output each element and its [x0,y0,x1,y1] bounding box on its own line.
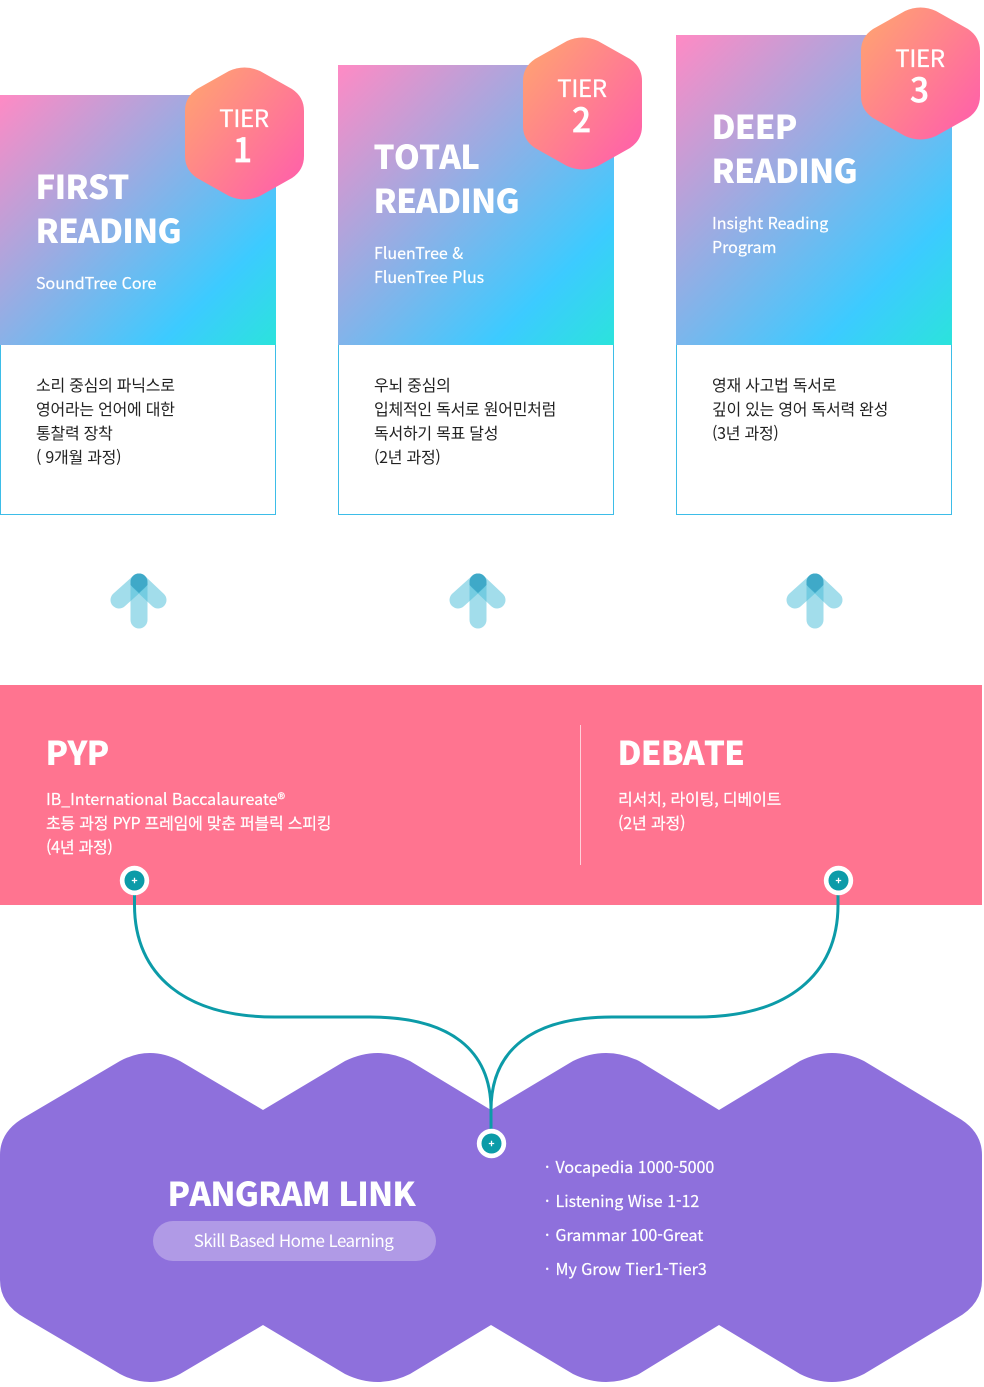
list item: Listening Wise 1-12 [556,1188,699,1212]
heading: first reading [36,161,181,253]
tier number 3: 3 [910,64,929,112]
debate description: 리서치, 라이팅, 디베이트 [618,786,781,810]
panel: pyp and debate band [0,685,982,905]
pyp description: 초등 과정 PYP 프레임에 맞춘 퍼블릭 스피킹 [46,810,331,834]
subtitle: fluentree: FluenTree Plus [374,264,484,288]
subtitle: soundtree core: SoundTree Core [36,270,156,294]
icon: node debate [824,866,854,896]
icon: node pangram [476,1128,506,1158]
divider [580,725,581,865]
list item: · [545,1154,549,1178]
description text: 우뇌 중심의 [374,372,451,396]
panel: total reading [338,38,642,515]
list item: · [545,1188,549,1212]
description text: 깊이 있는 영어 독서력 완성 [712,396,888,420]
heading: total reading [374,131,519,223]
description box [0,345,276,515]
heading: deep reading [712,101,857,193]
description text: (2년 과정) [374,444,441,468]
subtitle: insight reading: Insight Reading [712,210,828,234]
pill: skill based home learning: Skill Based Home Learning [194,1227,393,1252]
tier label 1: TIER [219,99,269,134]
card gradient header [338,65,614,345]
heading: pangram link: PANGRAM LINK [168,1168,415,1216]
pyp description: (4년 과정) [46,834,113,858]
icon: tier hexagon 1 [185,68,304,200]
description text: ( 9개월 과정) [36,444,121,468]
tier number 1: 1 [233,124,252,172]
pyp description: IB_International Baccalaureate® [46,786,285,810]
heading: first reading: FIRST [36,161,129,209]
pyp description [46,786,331,858]
list item: My Grow Tier1-Tier3 [556,1256,707,1280]
list: pangram programs [545,1154,714,1280]
icon: up arrow 1 [110,574,166,628]
list item: · [545,1256,549,1280]
card gradient header [0,95,276,345]
description text: 독서하기 목표 달성 [374,420,498,444]
description text: 소리 중심의 파닉스로 [36,372,175,396]
heading: pyp: PYP [46,727,109,775]
heading: total reading: READING [374,175,519,223]
description text [374,372,556,468]
tier number 2: 2 [572,94,591,142]
list item: Grammar 100-Great [556,1222,703,1246]
description box [338,345,614,515]
description text [36,372,175,468]
tier label 3: TIER [895,39,945,74]
icon: node pyp [120,866,150,896]
debate description: (2년 과정) [618,810,685,834]
description text: (3년 과정) [712,420,779,444]
description text [712,372,888,444]
icon: up arrow 2 [450,574,506,628]
card gradient header [676,35,952,345]
list item: Vocapedia 1000-5000 [556,1154,714,1178]
description box [676,345,952,515]
icon: tier hexagon 2 [523,38,642,170]
subtitle: fluentree [374,240,484,288]
heading: deep reading: READING [712,145,857,193]
tier label 2: TIER [557,69,607,104]
heading: deep reading: DEEP [712,101,797,149]
pill: skill based home learning [153,1221,436,1261]
description text: 입체적인 독서로 원어민처럼 [374,396,556,420]
heading: total reading: TOTAL [374,131,479,179]
subtitle: fluentree: FluenTree & [374,240,463,264]
list item: · [545,1222,549,1246]
subtitle: insight reading [712,210,828,258]
subtitle: insight reading: Program [712,234,776,258]
description text: 영재 사고법 독서로 [712,372,836,396]
heading: first reading: READING [36,205,181,253]
panel: first reading [0,68,304,515]
panel: deep reading [676,8,980,515]
debate description [618,786,781,834]
icon: tier hexagon 3 [861,8,980,140]
icon: up arrow 3 [786,574,842,628]
description text: 통찰력 장착 [36,420,113,444]
description text: 영어라는 언어에 대한 [36,396,175,420]
heading: debate: DEBATE [618,727,744,775]
